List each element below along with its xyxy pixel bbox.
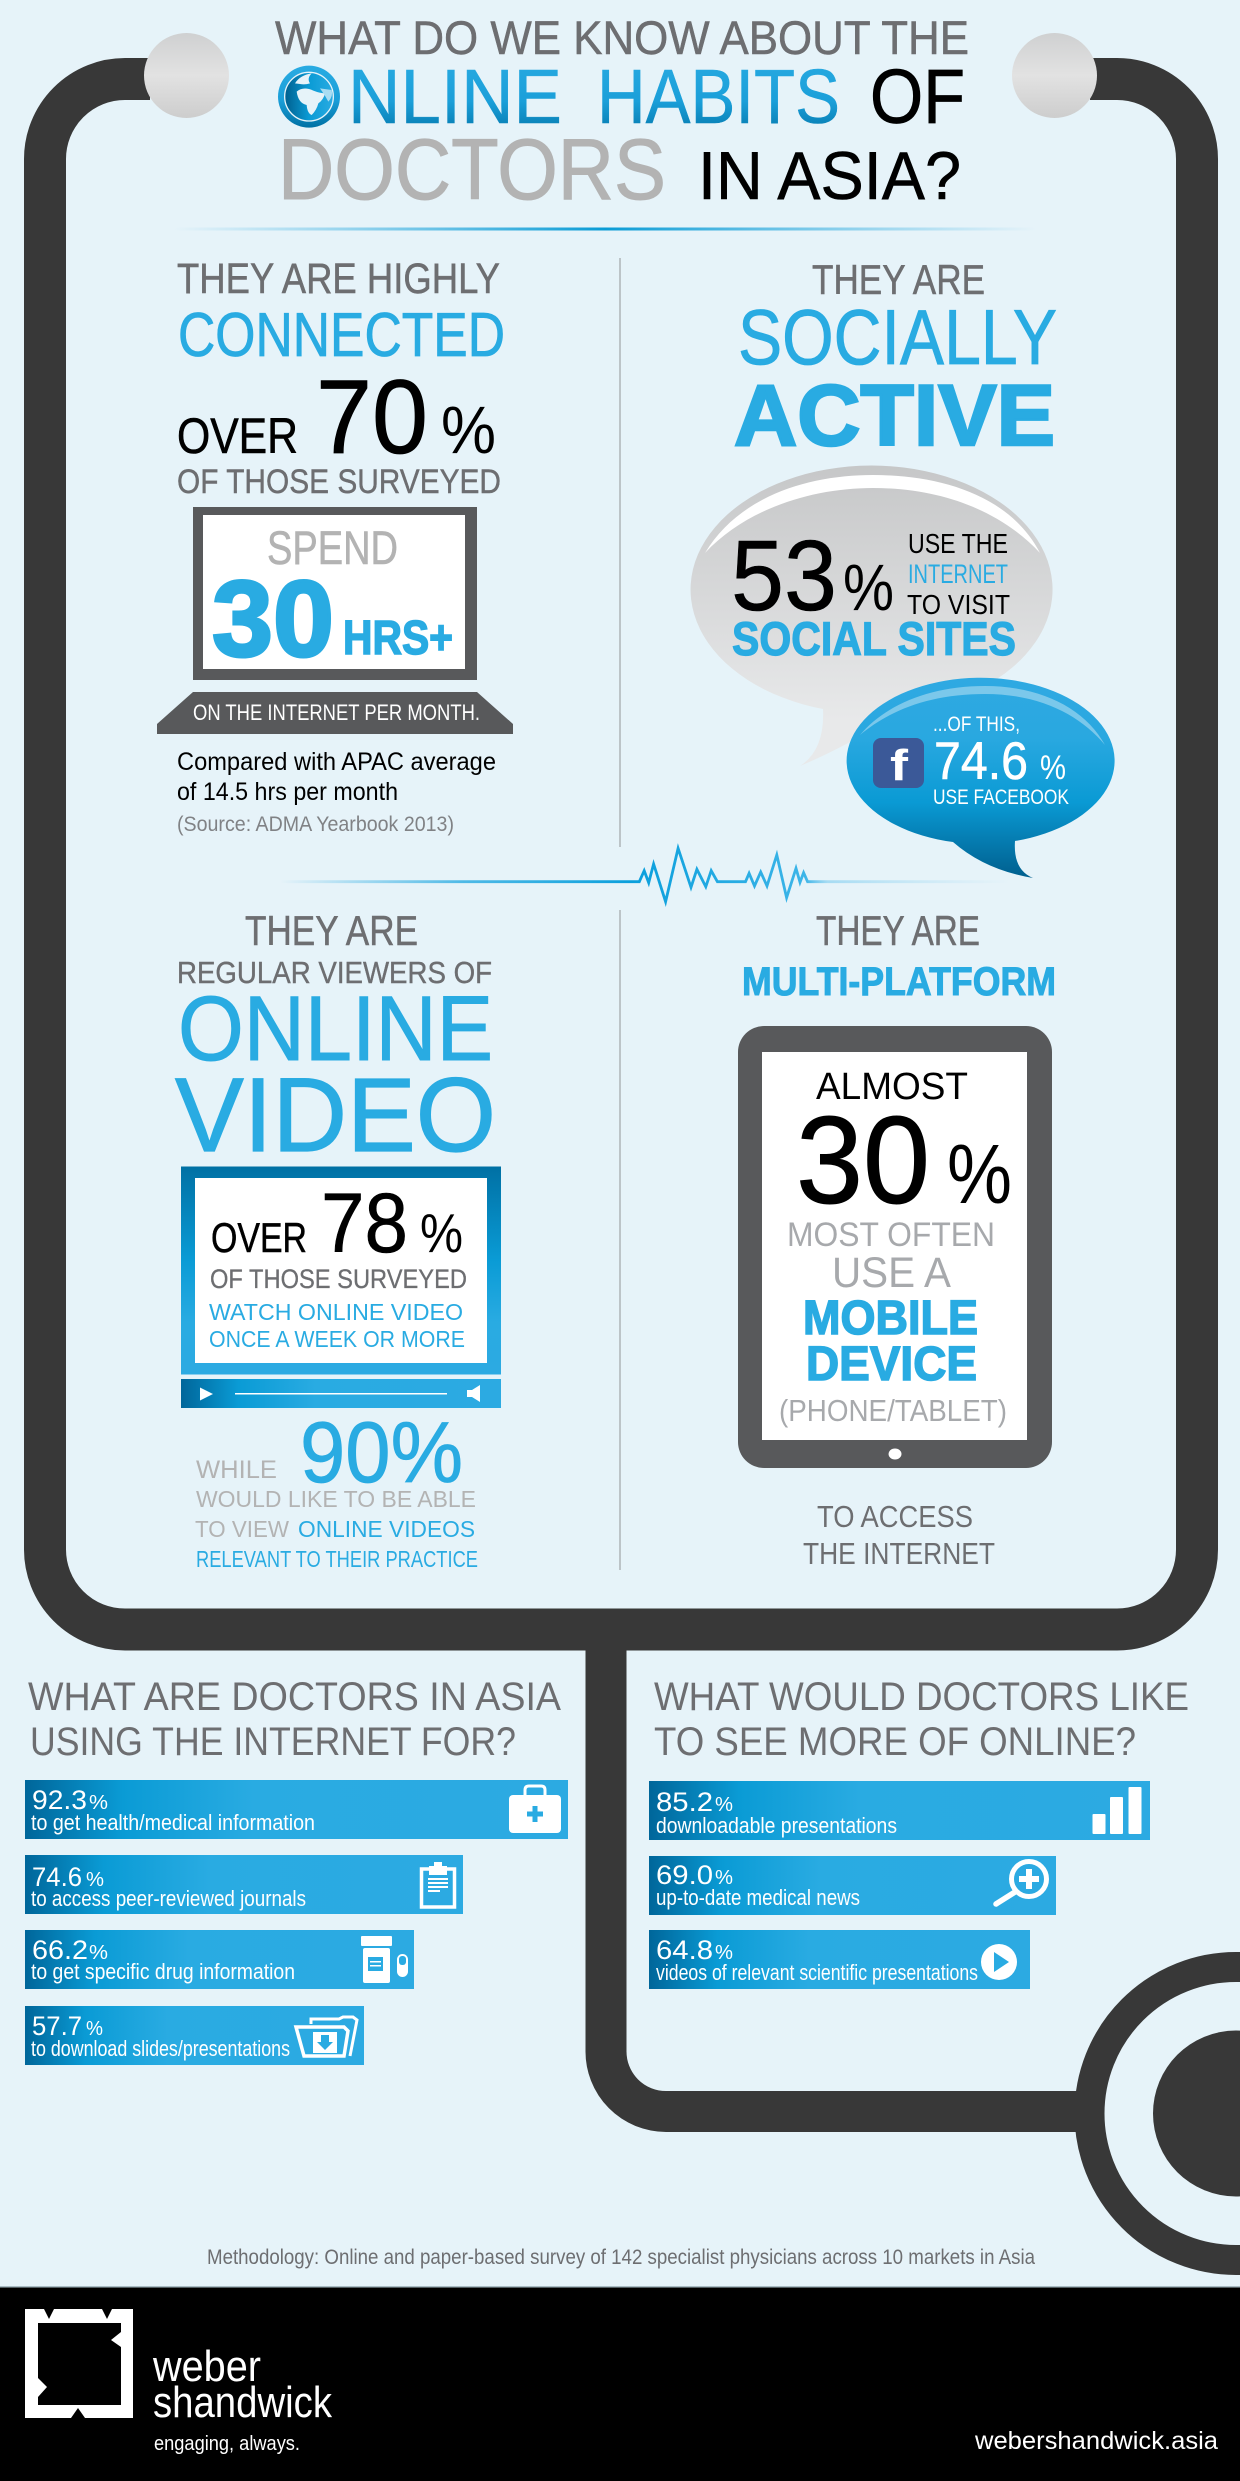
stat: 90 percent: WHILE — [196, 1456, 277, 1484]
bar: drug information: % — [89, 1942, 108, 1964]
stat: over 70 percent: % — [441, 393, 496, 468]
tablet — [738, 1026, 1052, 1468]
stat: 90 percent: 90% — [300, 1405, 463, 1501]
bar: presentations: % — [715, 1794, 733, 1816]
heading: CONNECTED — [178, 301, 505, 370]
tablet: DEVICE — [806, 1338, 977, 1391]
speech bubble: facebook: ...OF THIS, — [933, 713, 1020, 736]
heading — [175, 907, 496, 1174]
video controls — [181, 1379, 501, 1408]
heading: MULTI-PLATFORM — [742, 960, 1056, 1004]
title: NLINE — [348, 54, 562, 140]
heading: THEY ARE — [245, 907, 418, 954]
stat: over 70 percent: OF THOSE SURVEYED — [177, 463, 501, 501]
heartbeat line — [280, 848, 1010, 902]
title: HABITS — [597, 54, 840, 140]
methodology note: Methodology: Online and paper-based survey of 142 specialist physicians across 10 markets in Asia — [207, 2246, 1035, 2269]
bar: health information: to get health/medical information — [31, 1810, 315, 1835]
icon: pill bottle — [361, 1936, 408, 1983]
video screen: % — [420, 1202, 463, 1264]
heading: THEY ARE HIGHLY — [177, 255, 500, 303]
bar: health information — [25, 1780, 568, 1839]
icon: globe — [278, 66, 340, 128]
bar: medical news: 69.0 — [656, 1860, 713, 1890]
heading: THEY ARE — [816, 907, 980, 954]
tablet: USE A — [832, 1249, 951, 1297]
bar: drug information: 66.2 — [32, 1935, 88, 1965]
video screen: WATCH ONLINE VIDEO — [209, 1299, 463, 1325]
tablet: MOST OFTEN — [787, 1216, 995, 1254]
heading: VIDEO — [175, 1057, 496, 1174]
bar: journals: to access peer-reviewed journals — [31, 1886, 306, 1911]
bar: health information: % — [89, 1792, 108, 1814]
caption: THE INTERNET — [803, 1536, 995, 1571]
heading — [734, 256, 1057, 464]
wordmark: weber — [152, 2342, 261, 2391]
panel: internet usage — [25, 1675, 568, 2065]
panel: multi-platform — [738, 907, 1056, 1571]
speech bubble: 53 percent — [691, 466, 1053, 766]
website: webershandwick.asia — [974, 2427, 1218, 2455]
speech bubble: 53 percent: 53 — [731, 520, 837, 632]
title: OF — [870, 54, 965, 140]
speech bubble: 53 percent: SOCIAL SITES — [732, 612, 1016, 665]
icon: magnifier — [996, 1862, 1046, 1904]
comparison note — [177, 748, 496, 836]
heading — [742, 907, 1056, 1004]
bar: scientific videos: % — [715, 1942, 733, 1964]
speech bubble: 53 percent: USE THE — [908, 528, 1008, 559]
icon: medical bag — [509, 1786, 561, 1833]
laptop: ON THE INTERNET PER MONTH. — [193, 700, 480, 725]
speech bubble: 53 percent: TO VISIT — [907, 589, 1010, 620]
video screen: OF THOSE SURVEYED — [210, 1264, 467, 1294]
bar: presentations — [649, 1781, 1150, 1840]
panel: online video — [175, 907, 501, 1572]
bar: journals — [25, 1855, 463, 1914]
icon: clipboard — [422, 1862, 454, 1907]
video screen — [181, 1166, 501, 1374]
wordmark: shandwick — [153, 2378, 333, 2427]
bar: medical news: % — [715, 1867, 733, 1889]
heading: TO SEE MORE OF ONLINE? — [654, 1720, 1136, 1764]
bar: slides: % — [86, 2018, 103, 2040]
laptop: HRS+ — [343, 612, 453, 665]
video screen: ONCE A WEEK OR MORE — [209, 1326, 465, 1352]
heading: REGULAR VIEWERS OF — [177, 955, 492, 990]
stat: 90 percent: RELEVANT TO THEIR PRACTICE — [196, 1546, 478, 1572]
bar: medical news — [649, 1856, 1056, 1915]
icon: bar chart — [1092, 1787, 1142, 1834]
wordmark: engaging, always. — [154, 2433, 300, 2455]
tablet: (PHONE/TABLET) — [779, 1393, 1007, 1428]
comparison note: of 14.5 hrs per month — [177, 778, 398, 806]
heading: SOCIALLY — [738, 293, 1057, 381]
tablet: 30 — [796, 1092, 930, 1230]
bar: drug information: to get specific drug information — [31, 1959, 295, 1984]
bar: slides: to download slides/presentations — [31, 2036, 290, 2061]
bar: drug information — [25, 1930, 414, 1989]
speech bubble: facebook: % — [1040, 749, 1066, 787]
title — [275, 11, 969, 218]
icon: folder — [296, 2017, 357, 2056]
bar: presentations: downloadable presentations — [656, 1813, 897, 1838]
heading: USING THE INTERNET FOR? — [30, 1720, 516, 1764]
stat: 90 percent: WOULD LIKE TO BE ABLE — [196, 1486, 476, 1512]
footer — [0, 2286, 1240, 2481]
heading: WHAT ARE DOCTORS IN ASIA — [28, 1675, 561, 1719]
heading: THEY ARE — [812, 256, 985, 303]
wordmark — [152, 2342, 333, 2455]
bar: slides — [25, 2006, 364, 2065]
caption: TO ACCESS — [817, 1499, 973, 1534]
title: DOCTORS — [278, 122, 666, 218]
caption — [803, 1499, 995, 1571]
bar: presentations: 85.2 — [656, 1787, 713, 1817]
stat: over 70 percent: OVER — [177, 408, 298, 464]
tablet: % — [947, 1127, 1012, 1221]
video screen: 78 — [321, 1176, 408, 1270]
stat: 90 percent: ONLINE VIDEOS — [298, 1516, 475, 1542]
laptop: 30 — [212, 558, 334, 679]
bar: health information: 92.3 — [32, 1785, 87, 1815]
title: WHAT DO WE KNOW ABOUT THE — [275, 11, 969, 64]
bar: scientific videos: videos of relevant scientific presentations — [656, 1960, 978, 1985]
heading: WHAT WOULD DOCTORS LIKE — [654, 1675, 1189, 1719]
icon: facebook: f — [890, 741, 908, 790]
heading — [28, 1675, 561, 1764]
panel: highly connected — [157, 255, 513, 836]
stat: 90 percent: TO VIEW — [195, 1516, 289, 1542]
heading — [654, 1675, 1189, 1764]
video screen: OVER — [211, 1214, 307, 1261]
tablet: ALMOST — [816, 1066, 968, 1108]
speech bubble: facebook: 74.6 — [934, 732, 1028, 791]
speech bubble: facebook: USE FACEBOOK — [933, 786, 1069, 809]
speech bubble: facebook — [847, 678, 1115, 878]
icon: logo — [25, 2309, 133, 2418]
stat: 90 percent — [195, 1405, 478, 1572]
bar: medical news: up-to-date medical news — [656, 1885, 860, 1910]
tablet: MOBILE — [803, 1292, 978, 1345]
heading — [177, 255, 505, 370]
heading: ONLINE — [178, 978, 493, 1080]
bar: journals: % — [86, 1869, 104, 1891]
laptop — [157, 507, 513, 734]
stat: over 70 percent — [177, 359, 501, 501]
title: IN ASIA? — [698, 138, 961, 214]
panel: socially active — [691, 256, 1115, 878]
speech bubble: 53 percent: INTERNET — [908, 559, 1008, 589]
icon: play button — [981, 1944, 1017, 1980]
panel: content wanted — [649, 1675, 1189, 1989]
comparison note: (Source: ADMA Yearbook 2013) — [177, 813, 454, 836]
bar: journals: 74.6 — [32, 1862, 82, 1892]
bar: slides: 57.7 — [32, 2011, 82, 2041]
speech bubble: 53 percent: % — [843, 550, 894, 624]
laptop: SPEND — [267, 521, 398, 574]
bar: scientific videos — [649, 1930, 1030, 1989]
bar: scientific videos: 64.8 — [656, 1935, 713, 1965]
heading: ACTIVE — [734, 368, 1055, 464]
stat: over 70 percent: 70 — [316, 359, 428, 476]
icon: facebook — [873, 738, 924, 790]
comparison note: Compared with APAC average — [177, 748, 496, 776]
